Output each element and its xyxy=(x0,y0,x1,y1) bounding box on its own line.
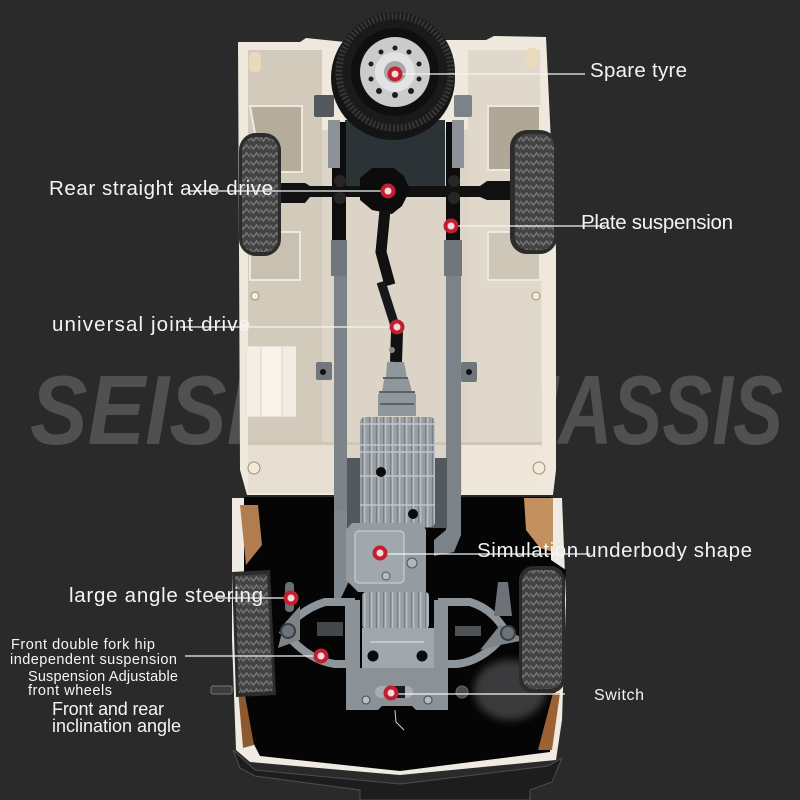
front right wheel xyxy=(519,566,565,693)
dark cross plate xyxy=(345,120,445,196)
right grey rail xyxy=(434,240,461,556)
left pivot xyxy=(281,624,295,638)
axle tube xyxy=(278,181,512,203)
label: front and rear inclination angle: Front and rear xyxy=(52,699,164,719)
spare tyre rubber xyxy=(335,12,455,132)
left steering link xyxy=(285,582,294,612)
rear axle xyxy=(278,168,512,214)
gearbox body xyxy=(346,417,468,730)
label: front double fork hip independent suspension: Front double fork hip xyxy=(11,637,155,653)
front left wheel xyxy=(232,570,276,697)
right upper rail xyxy=(446,122,460,244)
front bumper xyxy=(233,750,562,800)
housing inner cover xyxy=(355,531,404,583)
axle bolts xyxy=(334,175,460,204)
marker: plate suspension xyxy=(444,218,458,234)
label: plate suspension: Plate suspension xyxy=(581,211,733,234)
label: front and rear inclination angle: inclination angle xyxy=(52,716,181,736)
label: front double fork hip independent suspension xyxy=(10,637,177,668)
spare rim xyxy=(360,37,430,107)
label: front and rear inclination angle xyxy=(52,699,181,736)
raised panel upper right xyxy=(488,106,540,170)
label: universal joint drive: universal joint drive xyxy=(52,313,250,336)
front left suspension xyxy=(278,582,360,668)
label: large angle steering: large angle steering xyxy=(69,584,263,607)
cab brown edge left xyxy=(240,505,262,565)
cab shell xyxy=(232,498,566,775)
label: suspension adjustable front wheels: front wheels xyxy=(28,683,112,699)
mount posts xyxy=(248,48,545,474)
cylinder hole upper xyxy=(376,467,386,477)
label: suspension adjustable front wheels xyxy=(28,669,178,699)
rear left wheel xyxy=(239,133,281,256)
cab black interior xyxy=(244,497,566,771)
bed shell xyxy=(238,36,556,495)
cab xyxy=(211,497,566,800)
left upper rail xyxy=(332,122,346,244)
underbody housing xyxy=(346,523,426,592)
bed left panel xyxy=(248,50,322,445)
raised panel upper left xyxy=(250,106,302,172)
marker: universal joint xyxy=(390,320,404,334)
drive shaft xyxy=(381,210,397,362)
cylinder hole lower xyxy=(408,509,418,519)
white blocks xyxy=(246,346,296,417)
raised panel lower left xyxy=(250,232,300,280)
left arm arc xyxy=(284,602,358,664)
dark cross member xyxy=(347,458,447,528)
marker: spare tyre xyxy=(388,66,402,82)
front right suspension xyxy=(434,582,525,668)
right inner parts xyxy=(455,626,481,636)
spare tyre xyxy=(331,12,455,140)
marker: steering xyxy=(284,590,298,606)
callout lines xyxy=(180,74,605,694)
marker: underbody xyxy=(372,546,388,560)
raised panel lower right xyxy=(488,232,540,280)
right steering link xyxy=(494,582,512,616)
label: front double fork hip independent suspension: independent suspension xyxy=(10,652,177,668)
ribbed sump xyxy=(362,592,429,629)
floor shadow xyxy=(474,660,546,720)
chassis frame xyxy=(314,95,477,600)
cab lower brown trim right xyxy=(538,693,560,750)
label: suspension adjustable front wheels: Suspension Adjustable xyxy=(28,669,178,685)
marker: rear axle xyxy=(380,184,396,198)
differential xyxy=(360,168,410,214)
cab brown edge right xyxy=(524,498,553,552)
gearbox cone xyxy=(378,362,416,416)
rear right wheel xyxy=(510,130,557,254)
truck bed xyxy=(238,36,556,495)
bed centre floor xyxy=(322,130,468,493)
left inner parts xyxy=(317,622,343,636)
lower left rail xyxy=(334,510,352,600)
right pivot xyxy=(501,626,515,640)
spare shadow xyxy=(331,16,455,140)
switch plate xyxy=(346,668,448,710)
marker: switch xyxy=(384,686,398,700)
cab lower brown trim left xyxy=(238,690,254,748)
lower block xyxy=(362,628,434,669)
rim holes xyxy=(368,46,422,98)
side mirror stub xyxy=(211,686,232,694)
marker: front suspension xyxy=(314,648,328,664)
label: simulation underbody shape: Simulation underbody shape xyxy=(477,539,752,562)
watermark: seismic chassis: SEISMIC xyxy=(30,355,386,465)
label: spare tyre: Spare tyre xyxy=(590,59,687,82)
label: switch: Switch xyxy=(594,687,644,704)
watermark: seismic chassis xyxy=(30,355,783,465)
bed right panel xyxy=(468,50,542,445)
ribbed cylinder xyxy=(360,417,435,527)
label: rear straight axle drive: Rear straight axle drive xyxy=(49,177,273,200)
right arm arc xyxy=(436,602,506,664)
spring hangers xyxy=(314,95,477,382)
left grey rail xyxy=(334,242,347,512)
